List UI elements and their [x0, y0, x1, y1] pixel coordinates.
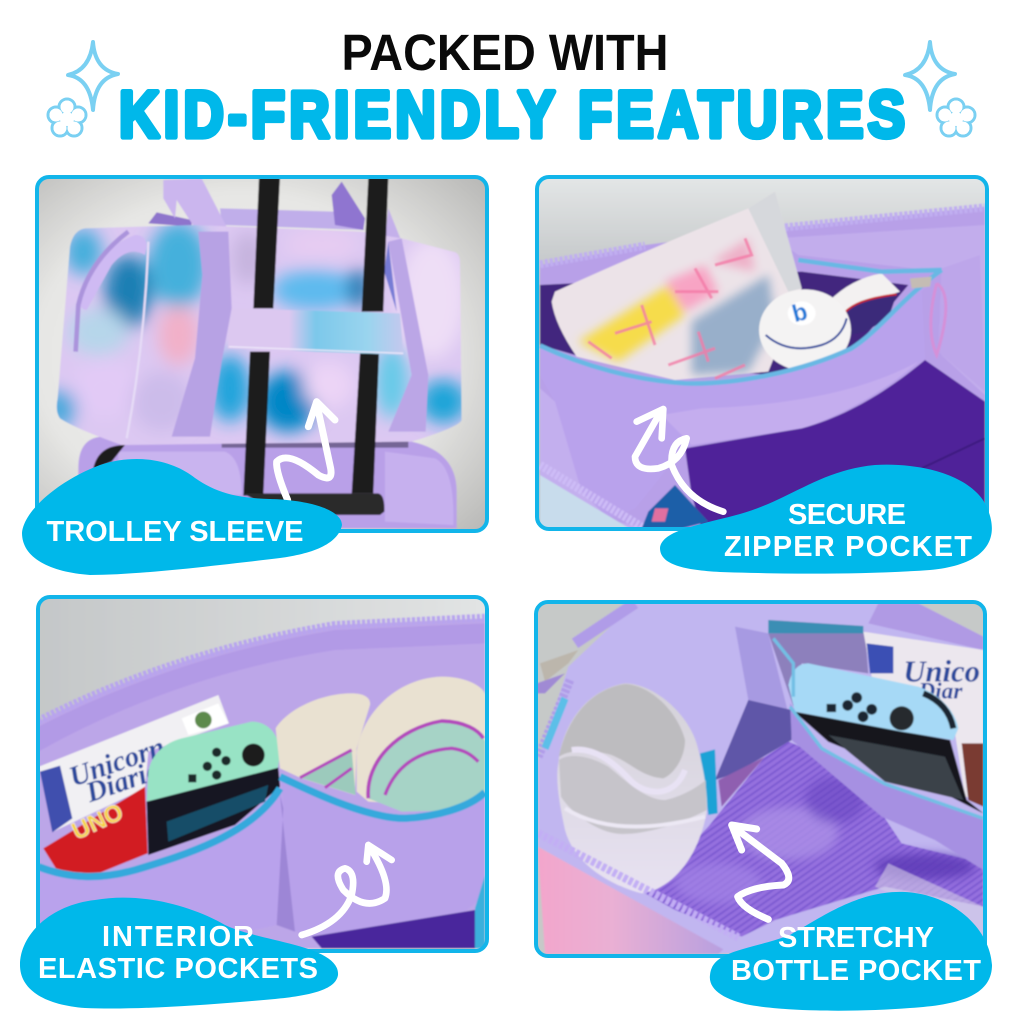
callout: stretchy bottle pocket: [710, 892, 992, 1011]
icon: flower left: [48, 99, 86, 136]
zip pull: [910, 277, 932, 288]
panel: elastic pockets photo: Diaries: [81, 751, 174, 809]
dark inside pocket: [540, 272, 908, 375]
book: [863, 632, 983, 800]
callout: secure zipper pocket: SECURE: [788, 499, 906, 531]
callout: stretchy bottle pocket: STRETCHY: [778, 922, 934, 954]
callout: interior elastic pockets: INTERIOR: [102, 921, 254, 953]
arrow: elastic pockets: [302, 845, 392, 935]
icon: sparkle right: [905, 42, 955, 110]
left pocket: [38, 788, 285, 948]
purple fabric: [685, 360, 985, 528]
bag interior: [38, 618, 485, 948]
callout: trolley sleeve: [22, 459, 342, 575]
bottle: [557, 683, 707, 893]
suitcase: [78, 437, 457, 528]
panel: elastic pockets photo: Unicorn: [65, 731, 169, 793]
handles: [148, 212, 192, 227]
switch: [147, 722, 280, 802]
panel: elastic pockets photo: UNO: [68, 798, 128, 845]
sleeve strap: [228, 308, 403, 355]
trolley poles: [253, 178, 280, 308]
pocket fabric: [799, 356, 840, 372]
panel: trolley sleeve photo: [35, 175, 490, 535]
arrow: zipper pocket: [635, 409, 723, 512]
arrow: trolley sleeve: [277, 402, 335, 500]
callout: stretchy bottle pocket: BOTTLE POCKET: [731, 955, 981, 987]
pocket front: [790, 703, 983, 870]
panel: bottle pocket photo: Unico: [903, 655, 980, 689]
heading: kid-friendly features: KID-FRIENDLY FEATURES: [119, 78, 905, 151]
panel: zipper pocket photo: b: [789, 298, 811, 328]
zippers blue: [540, 270, 942, 383]
pouch: [552, 192, 802, 380]
icon: sparkle left: [68, 42, 118, 110]
panel: bottle pocket photo: Diar: [917, 678, 963, 704]
callout: secure zipper pocket: ZIPPER POCKET: [724, 531, 972, 563]
clothes: [642, 485, 708, 528]
panel: zipper pocket photo: [535, 175, 990, 535]
strap right: [388, 238, 428, 432]
panel: bottle pocket photo: [535, 600, 990, 960]
bag exterior: [538, 847, 723, 954]
callout: interior elastic pockets: ELASTIC POCKETS: [38, 953, 318, 985]
callout: trolley sleeve: TROLLEY SLEEVE: [46, 516, 304, 548]
inner back: [775, 225, 985, 395]
right pocket: [462, 798, 485, 812]
interior purple: [312, 910, 475, 948]
arrow: bottle pocket: [732, 825, 789, 919]
title: [119, 24, 905, 151]
switch: [794, 712, 983, 813]
left side: [540, 390, 638, 527]
pocket behind: [768, 632, 868, 707]
corduroy: [645, 742, 983, 937]
end panel seam and zipper: [127, 242, 148, 438]
uno box: [43, 787, 148, 873]
bag rim: [540, 207, 985, 528]
slippers: [276, 693, 370, 795]
strap left: [172, 232, 232, 437]
heading: packed with: PACKED WITH: [342, 24, 668, 81]
back divider: [735, 626, 788, 710]
headphones: [828, 273, 900, 313]
callout: secure zipper pocket: [660, 465, 992, 574]
panel: elastic pockets photo: [35, 595, 490, 955]
book: [39, 695, 229, 832]
plastic: [875, 863, 983, 937]
bag body: [43, 218, 468, 452]
bag interior: [538, 603, 983, 953]
elastic trims: [38, 788, 280, 877]
callout: interior elastic pockets: [20, 898, 338, 1009]
icon: flower right: [937, 99, 975, 136]
